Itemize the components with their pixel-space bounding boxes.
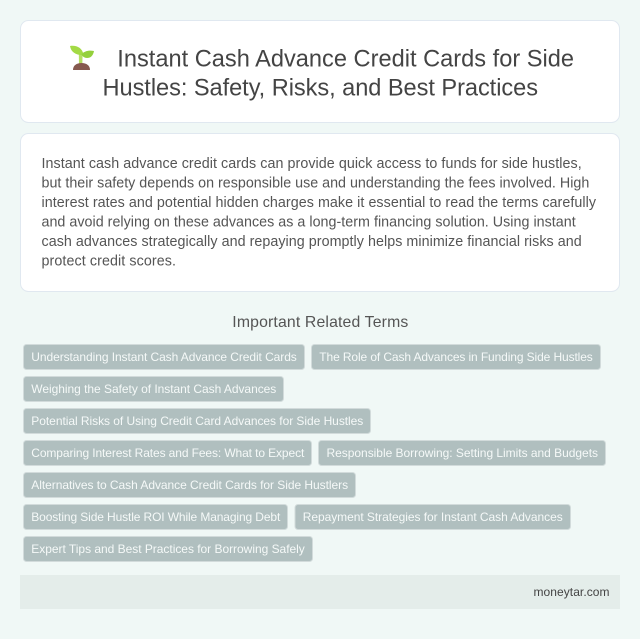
tag: understanding [24, 344, 304, 370]
summary text: Instant cash advance credit cards can provide quick access to funds for side hustles, [42, 156, 582, 172]
title text: Hustles: Safety, Risks, and Best Practices [102, 76, 538, 102]
tag: ROI [24, 504, 288, 530]
tag: repayment: Repayment Strategies for Instant Cash Advances [303, 510, 563, 524]
summary text: interest rates and potential hidden charges make it essential to read the terms carefully [42, 195, 597, 211]
panel: summary [20, 134, 620, 292]
tag: responsible borrowing [318, 440, 606, 466]
summary text: protect credit scores. [42, 254, 176, 270]
tag: alternatives: Alternatives to Cash Advance Credit Cards for Side Hustlers [31, 478, 348, 492]
tag: safety: Weighing the Safety of Instant Cash Advances [31, 382, 276, 396]
summary text: cash advances strategically and repaying promptly helps minimize financial risks and [42, 234, 582, 250]
icon: sprout [70, 46, 94, 70]
panel: title header [20, 20, 620, 122]
footer: source: moneytar.com [534, 585, 610, 599]
tag: understanding: Understanding Instant Cash Advance Credit Cards [31, 350, 297, 364]
summary text: but their safety depends on responsible use and understanding the fees involved. High [42, 176, 589, 192]
tag list [24, 344, 606, 562]
tag: expert tips: Expert Tips and Best Practices for Borrowing Safely [31, 542, 305, 556]
tag: ROI: Boosting Side Hustle ROI While Managing Debt [31, 510, 281, 524]
tag: interest rates: Comparing Interest Rates and Fees: What to Expect [31, 446, 305, 460]
heading: related terms: Important Related Terms [232, 314, 408, 331]
summary text: and avoid relying on these advances as a long-term financing solution. Using instant [42, 214, 576, 230]
tag: role of cash advances: The Role of Cash Advances in Funding Side Hustles [319, 350, 593, 364]
tag: responsible borrowing: Responsible Borrowing: Setting Limits and Budgets [326, 446, 598, 460]
tag: repayment [295, 504, 570, 530]
tag: safety [24, 376, 284, 402]
footer [20, 575, 620, 609]
tag: risks [24, 408, 370, 434]
tag: expert tips [24, 536, 312, 562]
tag: alternatives [24, 472, 356, 498]
tag: risks: Potential Risks of Using Credit Card Advances for Side Hustles [31, 414, 363, 428]
tag: interest rates [24, 440, 312, 466]
tag: role of cash advances [312, 344, 600, 370]
title text: Instant Cash Advance Credit Cards for Side [117, 46, 574, 72]
